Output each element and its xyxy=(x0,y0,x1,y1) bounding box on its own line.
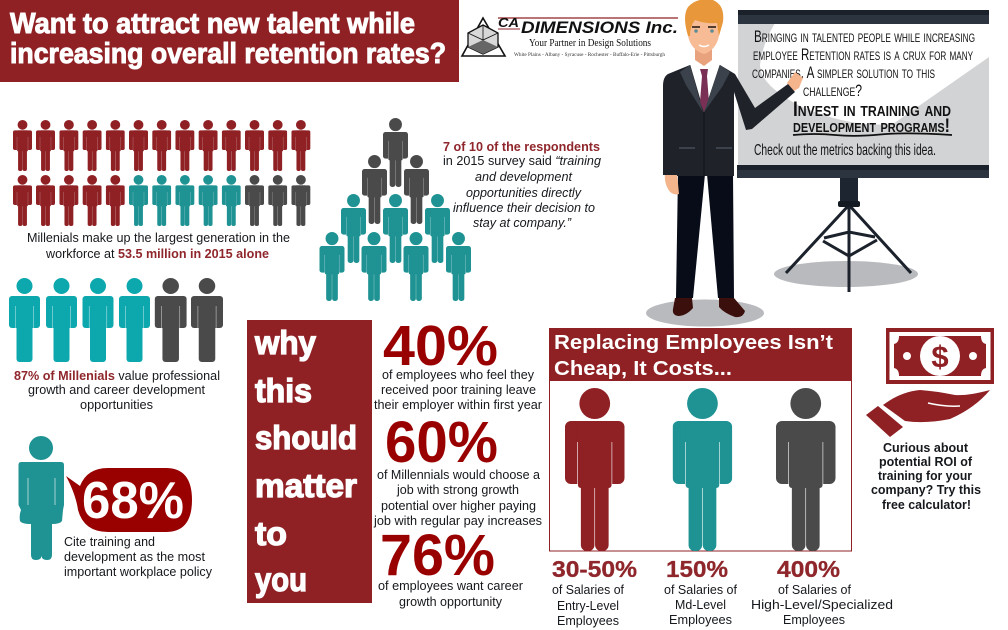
logo: CADimensions: Your Partner in Design Solutions xyxy=(529,37,651,49)
trousers xyxy=(676,174,734,298)
text: 7 of 10 respondents: and development xyxy=(475,170,573,184)
text: 87 percent of millennials: opportunities xyxy=(80,398,153,412)
logo: CADimensions xyxy=(462,15,678,58)
stat: 60 percent: job with regular pay increases xyxy=(373,514,542,528)
person: entry level xyxy=(565,388,624,551)
stat: 60 percent xyxy=(373,410,542,528)
stat: 60 percent: of Millennials would choose a xyxy=(377,468,540,482)
cost: entry level xyxy=(552,556,637,628)
icon: hand holding money xyxy=(866,328,994,437)
panel heading: Cheap, It Costs... xyxy=(554,357,732,380)
panel: why this should matter to you: you xyxy=(255,561,307,598)
person: high level xyxy=(776,388,836,551)
text: ROI calculator call to action: training for your xyxy=(878,469,972,483)
panel: replacing employees costs xyxy=(549,328,852,551)
neck xyxy=(695,46,712,66)
panel: why this should matter to you: should xyxy=(255,419,357,456)
cost: mid level: of Salaries of xyxy=(664,583,738,597)
presenter figure xyxy=(646,0,803,327)
text: workplace policy: important workplace policy xyxy=(64,565,213,579)
icon: woman figure xyxy=(18,436,64,560)
head xyxy=(688,8,719,54)
hair xyxy=(685,0,723,36)
cost: mid level xyxy=(664,556,738,627)
text: ROI calculator call to action xyxy=(871,441,981,512)
stat: 40 percent: of employees who feel they xyxy=(382,368,535,382)
title banner xyxy=(0,0,459,82)
panel heading: Replacing Employees Isn’t xyxy=(554,331,833,354)
stat: 60 percent: potential over higher paying xyxy=(381,499,536,513)
text: 7 of 10 respondents: stay at company.” xyxy=(473,216,572,230)
cost: high level: of Salaries of xyxy=(778,583,852,597)
stat: 40 percent: their employer within first year xyxy=(374,398,542,412)
stand shadow xyxy=(774,261,918,287)
text: 7 of 10 respondents xyxy=(443,140,601,230)
stat: 60 percent: 60% xyxy=(385,410,498,475)
row 1 xyxy=(13,120,310,171)
panel: why this should matter to you: matter xyxy=(255,467,357,504)
raised hand xyxy=(787,72,803,92)
stat: 40 percent: received poor training leave xyxy=(381,383,536,397)
panel heading xyxy=(549,328,852,381)
board surface xyxy=(738,23,989,166)
panel: why this should matter to you: to xyxy=(255,515,287,552)
cost: mid level: Employees xyxy=(669,613,732,627)
text: 87 percent of millennials: growth and career development xyxy=(28,383,206,397)
panel: why this should matter to you: why xyxy=(254,324,317,361)
stat: 76 percent: growth opportunity xyxy=(399,595,503,609)
pictogram: generation share, two rows xyxy=(13,120,310,226)
logo: CADimensions: White Plains - Albany - Syracuse - Rochester - Buffalo-Erie - Pittsburgh xyxy=(514,53,666,58)
stat: 76 percent xyxy=(378,523,523,609)
text: 87 percent of millennials: 87% of Millenials value professional xyxy=(14,369,220,383)
cost: mid level: 150% xyxy=(666,556,728,582)
speech bubble: 68 percent: 68% xyxy=(82,472,184,530)
text: millennials largest generation: workforce at 53.5 million in 2015 alone xyxy=(45,247,269,261)
row 2 xyxy=(13,175,310,226)
text: 7 of 10 respondents: in 2015 survey said “training xyxy=(443,154,601,168)
shoes xyxy=(673,298,693,316)
text: ROI calculator call to action: Curious about xyxy=(883,441,969,455)
text: 7 of 10 respondents: influence their decision to xyxy=(453,201,595,215)
jacket with arm xyxy=(663,65,795,176)
tie xyxy=(700,69,709,112)
logo: CADimensions: DIMENSIONS Inc. xyxy=(521,18,678,37)
text: millennials largest generation: Millenials make up the largest generation in the xyxy=(27,231,290,245)
text: 7 of 10 respondents: opportunities directly xyxy=(466,186,582,200)
text: 7 of 10 respondents: 7 of 10 of the respondents xyxy=(443,140,600,154)
cost: entry level: of Salaries of xyxy=(552,583,625,597)
presentation board with stand xyxy=(737,10,989,292)
pictogram: 87 percent xyxy=(9,278,223,362)
stat: 76 percent: of employees want career xyxy=(378,579,523,593)
text: 87 percent of millennials xyxy=(14,369,220,412)
text: ROI calculator call to action: free calculator! xyxy=(882,498,971,512)
cost: high level xyxy=(751,556,893,627)
logo: CADimensions: CA xyxy=(498,15,519,30)
person: mid level xyxy=(673,388,732,551)
board text xyxy=(752,27,975,159)
left hand xyxy=(665,173,679,194)
stat: 76 percent: 76% xyxy=(380,523,495,588)
stat: 40 percent: 40% xyxy=(383,314,498,378)
tripod xyxy=(786,205,911,292)
text: workplace policy xyxy=(64,535,213,579)
pictogram: pyramid of people xyxy=(320,118,471,301)
cost: high level: 400% xyxy=(777,556,840,582)
face details xyxy=(692,26,716,28)
text: ROI calculator call to action: potential ROI of xyxy=(879,455,973,469)
board text: challenge? xyxy=(803,81,862,100)
cost: entry level: Employees xyxy=(557,614,619,628)
text: workplace policy: development as the most xyxy=(64,550,206,564)
cost: entry level: 30-50% xyxy=(552,556,637,582)
cost: high level: High-Level/Specialized xyxy=(751,598,893,612)
text: ROI calculator call to action: company? Try this xyxy=(871,483,981,497)
panel: why this should matter to you: this xyxy=(255,372,312,409)
cost: high level: Employees xyxy=(783,613,845,627)
title banner: increasing overall retention rates? xyxy=(10,38,446,70)
floor shadow xyxy=(646,300,764,326)
cost: mid level: Md-Level xyxy=(675,598,726,612)
text: workplace policy: Cite training and xyxy=(64,535,155,549)
stat: 40 percent xyxy=(374,314,542,412)
lapels xyxy=(680,65,730,112)
icon: hand holding money: $ xyxy=(931,339,949,374)
panel: why this should matter to you xyxy=(247,320,372,603)
board text: Invest in training and xyxy=(793,98,951,121)
shirt xyxy=(690,64,720,112)
board text: development programs! xyxy=(793,116,950,137)
title banner: Want to attract new talent while xyxy=(10,8,415,40)
text: millennials largest generation xyxy=(27,231,290,261)
stat: 60 percent: job with strong growth xyxy=(396,483,519,497)
cost: entry level: Entry-Level xyxy=(557,599,619,613)
